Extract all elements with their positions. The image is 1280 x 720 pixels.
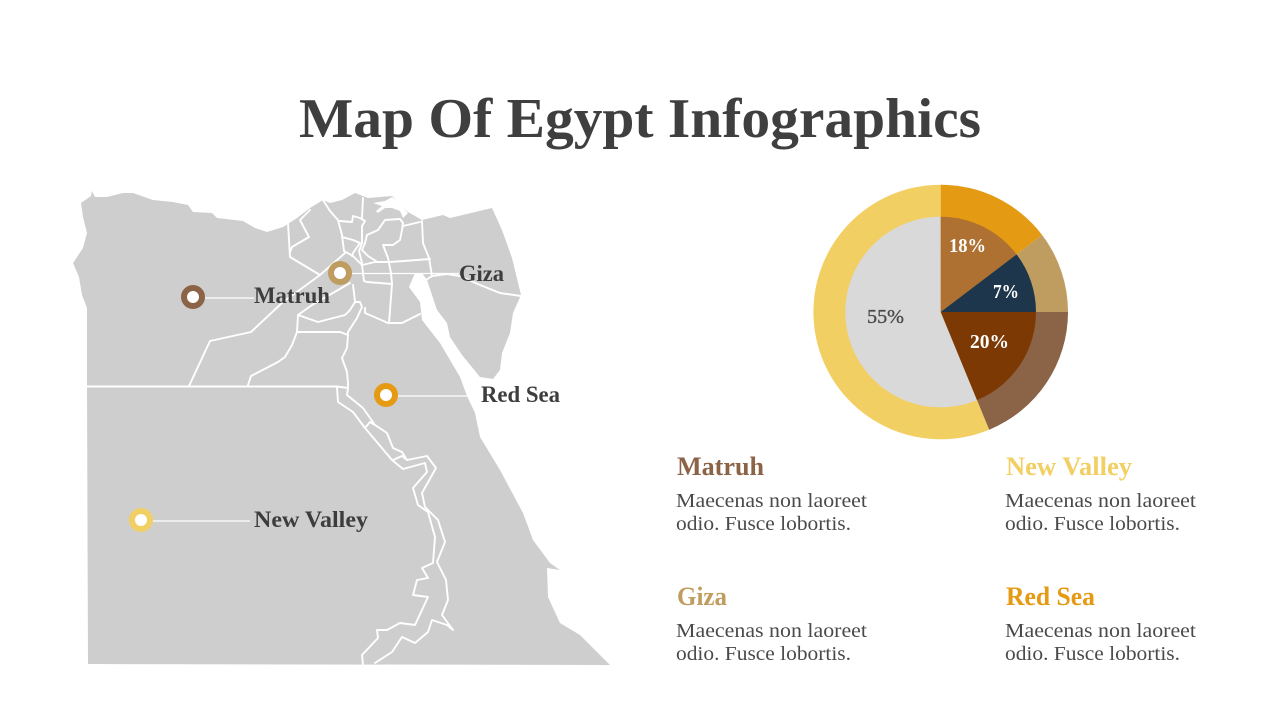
legend: Giza: Maecenas non laoreet: [676, 620, 867, 642]
governorate borders: [87, 198, 521, 665]
marker: New Valley: [132, 507, 369, 532]
pie value labels: 7%: [993, 281, 1019, 303]
title: Map Of Egypt Infographics: [299, 88, 981, 150]
legend: Giza: [676, 582, 867, 665]
map silhouette: [73, 191, 610, 665]
Nile left bank: [337, 388, 435, 665]
inner pie sectors: [845, 217, 1036, 407]
marker: Giza: [331, 261, 504, 286]
legend: New Valley: Maecenas non laoreet: [1005, 490, 1196, 512]
legend: New Valley: New Valley: [1006, 452, 1132, 481]
marker: Red Sea: Red Sea: [481, 382, 560, 407]
outer ring sectors: [813, 185, 1068, 439]
legend: Red Sea: odio. Fusce lobortis.: [1005, 643, 1180, 665]
pie chart: [813, 185, 1068, 439]
Nile right bank: [347, 388, 453, 663]
legend: New Valley: [1005, 452, 1196, 535]
legend: Matruh: odio. Fusce lobortis.: [676, 513, 851, 535]
pie value labels: 20%: [970, 331, 1009, 353]
pie value labels: 18%: [949, 235, 986, 257]
marker: Giza: Giza: [459, 261, 504, 286]
legend: Red Sea: Red Sea: [1006, 582, 1095, 611]
legend: Matruh: Matruh: [677, 452, 765, 481]
legend: Giza: odio. Fusce lobortis.: [676, 643, 851, 665]
map of Egypt: [73, 191, 610, 665]
marker: Matruh: Matruh: [254, 283, 330, 308]
legend: Red Sea: [1005, 582, 1196, 665]
legend: Giza: Giza: [677, 582, 727, 611]
legend: Matruh: [676, 452, 867, 535]
legend: Matruh: Maecenas non laoreet: [676, 490, 867, 512]
coastal lake: [373, 197, 408, 218]
legend: New Valley: odio. Fusce lobortis.: [1005, 513, 1180, 535]
legend: Red Sea: Maecenas non laoreet: [1005, 620, 1196, 642]
marker: Red Sea: [377, 382, 560, 407]
marker: New Valley: New Valley: [254, 507, 369, 532]
pie value labels: 55%: [867, 306, 904, 328]
marker: Matruh: [184, 283, 330, 308]
pie value labels: [867, 235, 1019, 353]
